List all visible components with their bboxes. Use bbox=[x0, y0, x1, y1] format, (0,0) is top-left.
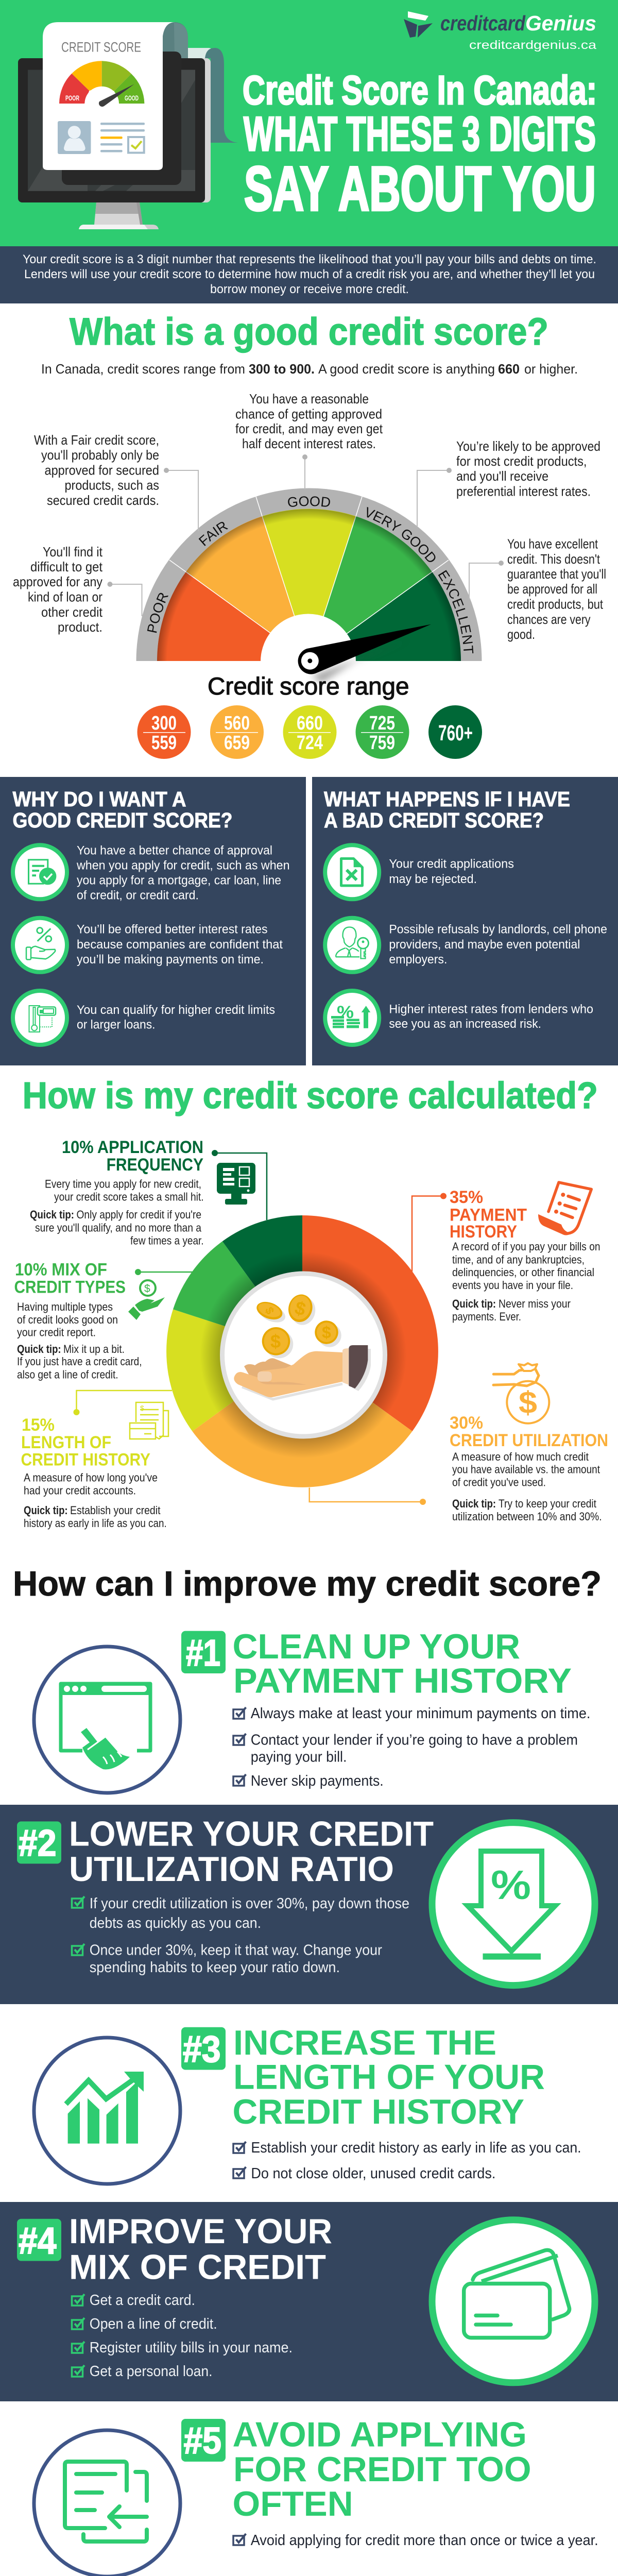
callout: excellent: be approved for all bbox=[507, 581, 597, 597]
label: 35% payment history: Never miss your bbox=[499, 1297, 571, 1310]
badge #5: #5 bbox=[184, 2420, 221, 2462]
label: 10% application frequency: Every time you apply for new credit, bbox=[45, 1178, 201, 1191]
icon: rejected document bbox=[325, 845, 379, 899]
label: 35% payment history: 35% bbox=[450, 1188, 483, 1207]
tip bullets bbox=[72, 2292, 293, 2380]
mini gauge bbox=[59, 61, 144, 107]
callout: good: chance of getting approved bbox=[235, 406, 382, 421]
callout: good bbox=[235, 391, 383, 489]
tip bullets: If your credit utilization is over 30%, pay down those bbox=[90, 1895, 409, 1912]
badge #4: #4 bbox=[19, 2221, 57, 2262]
subheading: score range: 660 bbox=[498, 361, 520, 377]
tip heading bbox=[69, 1815, 434, 1889]
callout: fair: you'll probably only be bbox=[41, 447, 159, 463]
gauge segments bbox=[157, 509, 461, 661]
coins and hand illustration: $ bbox=[322, 1323, 331, 1342]
tip bullets: Once under 30%, keep it that way. Change your bbox=[90, 1942, 382, 1958]
tip bullets: Do not close older, unused credit cards. bbox=[251, 2165, 495, 2182]
icon: percent down arrow bbox=[432, 1823, 595, 1986]
label: 15% length of credit history bbox=[21, 1391, 172, 1530]
score range circles: 759 bbox=[369, 732, 395, 754]
score range circles: 660 bbox=[297, 713, 323, 734]
text: better rates: You’ll be offered better interest rates bbox=[77, 923, 268, 937]
icon: rising interest: % bbox=[337, 1003, 354, 1022]
callout: good: for credit, and may even get bbox=[235, 421, 383, 436]
label: 10% mix of credit types: Quick tip: bbox=[17, 1343, 61, 1355]
score range circles: 560 bbox=[224, 713, 250, 734]
tip heading bbox=[233, 2023, 545, 2131]
icon: percent in hand bbox=[13, 918, 67, 972]
tip #3: increase the length of your credit history bbox=[34, 2023, 581, 2184]
label: 10% mix of credit types: CREDIT TYPES bbox=[14, 1277, 126, 1297]
tip bullets: debts as quickly as you can. bbox=[90, 1915, 261, 1931]
callout: fair: secured credit cards. bbox=[47, 493, 159, 508]
subheading: score range: or higher. bbox=[524, 361, 578, 377]
tip heading: OFTEN bbox=[233, 2484, 353, 2523]
tip bullets: Get a personal loan. bbox=[90, 2363, 212, 2380]
text: better rates bbox=[77, 923, 283, 967]
tip heading bbox=[69, 2212, 332, 2287]
illustration: monitor with credit score report bbox=[18, 22, 238, 229]
callout: fair: approved for secured bbox=[44, 462, 159, 478]
label: 10% mix of credit types: Having multiple types bbox=[17, 1300, 113, 1313]
label: 10% mix of credit types: of credit looks good on bbox=[17, 1313, 118, 1326]
label: 10% mix of credit types: 10% MIX OF bbox=[15, 1260, 107, 1280]
tip heading: CLEAN UP YOUR bbox=[233, 1627, 520, 1666]
text: better approval: You have a better chance of approval bbox=[77, 844, 272, 858]
callout: very good: and you'll receive bbox=[456, 468, 548, 484]
label: 15% length of credit history: Establish your credit bbox=[70, 1504, 161, 1517]
label: 30% credit utilization: Quick tip: bbox=[452, 1497, 496, 1510]
subheading: score range: In Canada, credit scores range from bbox=[41, 361, 245, 377]
tip heading: UTILIZATION RATIO bbox=[69, 1850, 394, 1889]
coins and hand illustration: $ bbox=[263, 1305, 277, 1316]
text: higher limits: or larger loans. bbox=[77, 1018, 156, 1031]
gauge needle bbox=[298, 624, 431, 683]
text: better approval: of credit, or credit card. bbox=[77, 888, 199, 902]
label: 15% length of credit history: CREDIT HISTORY bbox=[21, 1450, 150, 1469]
text: higher limits: You can qualify for higher credit limits bbox=[77, 1003, 275, 1017]
icon: browser and brush bbox=[34, 1647, 180, 1793]
heading: what is a good credit score: What is a good credit score? bbox=[70, 310, 548, 353]
heading: how can I improve my credit score: How can I improve my credit score? bbox=[13, 1564, 602, 1603]
intro band: Lenders will use your credit score to determine how much of a credit risk you are, and whether they’ll let you bbox=[24, 267, 595, 281]
label: 15% length of credit history: 15% bbox=[22, 1415, 55, 1435]
icon: percent down arrow: % bbox=[491, 1862, 531, 1908]
callout: very good: for most credit products, bbox=[456, 453, 587, 469]
label: 10% application frequency: Quick tip: bbox=[30, 1208, 74, 1221]
text: rejected bbox=[389, 857, 514, 886]
tip heading: INCREASE THE bbox=[233, 2023, 496, 2062]
tip heading: MIX OF CREDIT bbox=[69, 2248, 326, 2287]
coins and hand illustration: $ bbox=[293, 1297, 308, 1320]
icon: rising interest bbox=[325, 991, 379, 1045]
donut wedges bbox=[166, 1215, 438, 1487]
callout: poor: other credit bbox=[41, 604, 103, 620]
icon: credit cards bbox=[432, 2220, 595, 2383]
intro band: borrow money or receive more credit. bbox=[210, 282, 409, 296]
text: better approval: you apply for a mortgage, car loan, line bbox=[77, 874, 281, 888]
label: 30% credit utilization: utilization between 10% and 30%. bbox=[452, 1510, 602, 1523]
callout: excellent: You have excellent bbox=[507, 536, 598, 551]
tip bullets: spending habits to keep your ratio down. bbox=[90, 1959, 340, 1976]
label: 15% length of credit history: had your credit accounts. bbox=[24, 1484, 136, 1497]
icon: money in hand bbox=[128, 1280, 165, 1320]
coins and hand illustration bbox=[234, 1292, 371, 1399]
gauge chart bbox=[136, 488, 482, 686]
intro band: Your credit score is a 3 digit number that represents the likelihood that you’ll pay your bills and debts on time. bbox=[23, 252, 596, 266]
callout: poor: You'll find it bbox=[43, 544, 103, 560]
logo: creditcardGenius top bbox=[404, 11, 596, 52]
callout: very good: preferential interest rates. bbox=[456, 484, 591, 499]
text: better approval: when you apply for credit, such as when bbox=[76, 858, 289, 873]
label: 15% length of credit history: LENGTH OF bbox=[21, 1433, 111, 1452]
label: 35% payment history: delinquencies, or other financial bbox=[452, 1266, 594, 1279]
score range circles: 725 bbox=[369, 713, 395, 734]
tip heading: LENGTH OF YOUR bbox=[233, 2058, 545, 2097]
callout: excellent: credit products, but bbox=[507, 597, 604, 612]
icon: receipt bbox=[538, 1182, 591, 1235]
label: 10% application frequency: 10% APPLICATION bbox=[62, 1138, 203, 1157]
text: better approval bbox=[76, 844, 289, 902]
label: 30% credit utilization: Try to keep your credit bbox=[499, 1497, 596, 1510]
tip #2: lower your credit utilization ratio bbox=[0, 1805, 618, 2004]
icon: document with arrow bbox=[34, 2430, 180, 2576]
callout: very good: You’re likely to be approved bbox=[456, 438, 600, 454]
icon: computer bbox=[217, 1163, 255, 1205]
panel heading: GOOD CREDIT SCORE? bbox=[12, 808, 233, 832]
label: 30% credit utilization: 30% bbox=[450, 1413, 483, 1433]
tip #5: avoid applying for credit too often bbox=[34, 2415, 598, 2576]
tip bullets: Register utility bills in your name. bbox=[90, 2340, 293, 2356]
callout: poor: kind of loan or bbox=[28, 589, 102, 605]
callout: poor: approved for any bbox=[13, 574, 102, 589]
icon: rising chart bbox=[34, 2038, 180, 2184]
label: 15% length of credit history: Quick tip: bbox=[24, 1504, 68, 1517]
label: 10% mix of credit types: also get a line of credit. bbox=[17, 1368, 118, 1381]
heading: credit score range: Credit score range bbox=[208, 672, 409, 700]
callout: poor: difficult to get bbox=[30, 559, 103, 574]
subheading: score range: A good credit score is anything bbox=[318, 361, 495, 377]
logo: creditcardGenius top: creditcard bbox=[440, 11, 526, 35]
subheading: score range bbox=[41, 361, 578, 377]
title bbox=[243, 67, 597, 224]
callout: good: half decent interest rates. bbox=[242, 436, 376, 451]
logo: creditcardGenius top: Genius bbox=[525, 11, 596, 35]
intro band bbox=[0, 246, 618, 303]
label: 35% payment history: HISTORY bbox=[450, 1222, 517, 1242]
panel heading: WHAT HAPPENS IF I HAVE bbox=[324, 787, 570, 811]
hero banner background bbox=[0, 0, 618, 246]
panel heading: A BAD CREDIT SCORE? bbox=[324, 808, 544, 832]
panel heading bbox=[324, 787, 570, 832]
label: 35% payment history: A record of if you pay your bills on bbox=[452, 1240, 600, 1253]
panel: what happens if I have a bad credit score bbox=[312, 777, 618, 1065]
tip #4: improve your mix of credit bbox=[0, 2202, 618, 2401]
label: 30% credit utilization: A measure of how much credit bbox=[452, 1450, 589, 1463]
gauge labels bbox=[147, 496, 474, 653]
icon: money bag bbox=[493, 1363, 549, 1423]
icon: money in hand: $ bbox=[144, 1283, 150, 1295]
text: higher rates: Higher interest rates from lenders who bbox=[389, 1003, 593, 1016]
callout: fair bbox=[34, 432, 198, 531]
label: 10% application frequency: few times a year. bbox=[130, 1234, 204, 1247]
tip heading: IMPROVE YOUR bbox=[69, 2212, 332, 2251]
callout: excellent: good. bbox=[507, 626, 535, 642]
profile block bbox=[58, 121, 145, 154]
mini gauge: GOOD bbox=[125, 94, 139, 102]
tip heading: FOR CREDIT TOO bbox=[233, 2450, 531, 2489]
label: 30% credit utilization bbox=[310, 1363, 608, 1523]
label: 15% length of credit history: history as early in life as you can. bbox=[24, 1517, 167, 1530]
panel: why do I want a good credit score bbox=[0, 777, 306, 1065]
tip heading bbox=[233, 2415, 531, 2523]
logo: creditcardGenius top: creditcardgenius.ca bbox=[469, 38, 596, 52]
label: 35% payment history: events you have in your file. bbox=[452, 1279, 573, 1292]
icon: money bag: $ bbox=[519, 1385, 537, 1420]
text: higher limits bbox=[77, 1003, 275, 1031]
score range circles: 724 bbox=[297, 732, 323, 754]
tip heading: PAYMENT HISTORY bbox=[233, 1662, 572, 1701]
tip bullets bbox=[233, 1705, 590, 1789]
icon: credit limit gauge bbox=[13, 991, 67, 1045]
label: 10% mix of credit types bbox=[14, 1260, 193, 1381]
badge #3: #3 bbox=[183, 2029, 221, 2070]
gauge labels: GOOD bbox=[288, 496, 330, 507]
text: refusals: Possible refusals by landlords, cell phone bbox=[389, 923, 607, 937]
callout: poor: product. bbox=[58, 619, 102, 635]
callout: fair: With a Fair credit score, bbox=[34, 432, 159, 448]
text: refusals: providers, and maybe even potential bbox=[389, 938, 580, 952]
text: better rates: you’ll be making payments on time. bbox=[77, 953, 264, 967]
coins and hand illustration: $ bbox=[270, 1331, 281, 1352]
donut chart bbox=[166, 1215, 438, 1487]
icon: bills and card bbox=[130, 1402, 168, 1439]
label: 10% mix of credit types: Mix it up a bit. bbox=[63, 1343, 125, 1355]
tip bullets: paying your bill. bbox=[251, 1749, 347, 1766]
badge #2: #2 bbox=[19, 1823, 57, 1864]
gauge labels: POOR bbox=[147, 592, 168, 633]
label: 35% payment history: time, and of any bankruptcies, bbox=[452, 1253, 585, 1266]
gauge labels: VERY GOOD bbox=[367, 507, 436, 562]
panel heading bbox=[12, 787, 233, 832]
badge #1: #1 bbox=[186, 1633, 220, 1674]
coin shadows bbox=[257, 1295, 341, 1358]
tip bullets: Establish your credit history as early in life as you can. bbox=[251, 2140, 581, 2156]
label: 35% payment history: payments. Ever. bbox=[452, 1310, 521, 1323]
icon: landlord with key bbox=[325, 918, 379, 972]
callout: very good bbox=[417, 438, 600, 527]
callout: good: You have a reasonable bbox=[249, 391, 369, 406]
text: higher rates: see you as an increased risk. bbox=[389, 1017, 541, 1031]
callout: fair: products, such as bbox=[65, 478, 159, 493]
label: 35% payment history: PAYMENT bbox=[450, 1205, 527, 1225]
tip heading: AVOID APPLYING bbox=[233, 2415, 527, 2454]
tip bullets: Never skip payments. bbox=[251, 1773, 384, 1789]
text: refusals bbox=[389, 923, 607, 967]
score range circles: 559 bbox=[151, 732, 177, 754]
score range circles: 300 bbox=[151, 713, 177, 734]
score range circles: 659 bbox=[224, 732, 250, 754]
panel heading: WHY DO I WANT A bbox=[12, 787, 186, 811]
text: better rates: because companies are confident that bbox=[77, 938, 283, 952]
mini gauge: POOR bbox=[65, 94, 79, 102]
tip bullets: Avoid applying for credit more than once or twice a year. bbox=[251, 2532, 598, 2549]
text: rejected: may be rejected. bbox=[389, 872, 477, 886]
label: 15% length of credit history: A measure of how long you've bbox=[24, 1471, 158, 1484]
subheading: score range: 300 to 900. bbox=[249, 361, 315, 377]
tip bullets: Contact your lender if you’re going to have a problem bbox=[251, 1732, 578, 1749]
tip heading bbox=[233, 1627, 572, 1701]
label: 10% application frequency bbox=[30, 1138, 267, 1247]
callout: excellent: credit. This doesn't bbox=[507, 551, 600, 567]
label: 10% mix of credit types: your credit report. bbox=[17, 1326, 96, 1339]
score range circles bbox=[137, 705, 482, 759]
tip #1: clean up your payment history bbox=[34, 1627, 590, 1793]
tip bullets bbox=[72, 1895, 409, 1976]
tip bullets: Always make at least your minimum payments on time. bbox=[251, 1705, 590, 1722]
text: higher rates bbox=[389, 1003, 593, 1031]
label: 35% payment history: Quick tip: bbox=[452, 1297, 496, 1310]
label: 35% payment history bbox=[412, 1182, 600, 1323]
label: 10% application frequency: your credit score takes a small hit. bbox=[54, 1191, 204, 1204]
icon: bills and card: $ bbox=[140, 1404, 144, 1412]
tip heading: CREDIT HISTORY bbox=[233, 2092, 524, 2131]
callout: poor bbox=[13, 544, 142, 635]
tip bullets: Get a credit card. bbox=[90, 2292, 195, 2309]
tip bullets bbox=[233, 2140, 581, 2182]
label: 10% mix of credit types: If you just have a credit card, bbox=[17, 1355, 142, 1368]
paper heading: CREDIT SCORE bbox=[61, 40, 141, 55]
label: 30% credit utilization: of credit you've used. bbox=[452, 1476, 546, 1489]
score range circles: 760+ bbox=[438, 721, 473, 745]
gauge outer band bbox=[136, 488, 482, 661]
gauge labels: EXCELLENT bbox=[438, 570, 474, 653]
label: 10% application frequency: FREQUENCY bbox=[107, 1155, 203, 1175]
text: refusals: employers. bbox=[389, 953, 447, 967]
text: rejected: Your credit applications bbox=[389, 857, 514, 871]
tip bullets: Open a line of credit. bbox=[90, 2316, 217, 2332]
callout: excellent: chances are very bbox=[507, 612, 590, 627]
tip heading: LOWER YOUR CREDIT bbox=[69, 1815, 434, 1854]
callout: excellent bbox=[469, 536, 606, 642]
label: 10% application frequency: sure you'll qualify, and no more than a bbox=[35, 1222, 202, 1234]
label: 10% application frequency: Only apply for credit if you're bbox=[76, 1208, 201, 1221]
gauge labels: FAIR bbox=[199, 522, 228, 546]
icon: approved document bbox=[13, 845, 67, 899]
